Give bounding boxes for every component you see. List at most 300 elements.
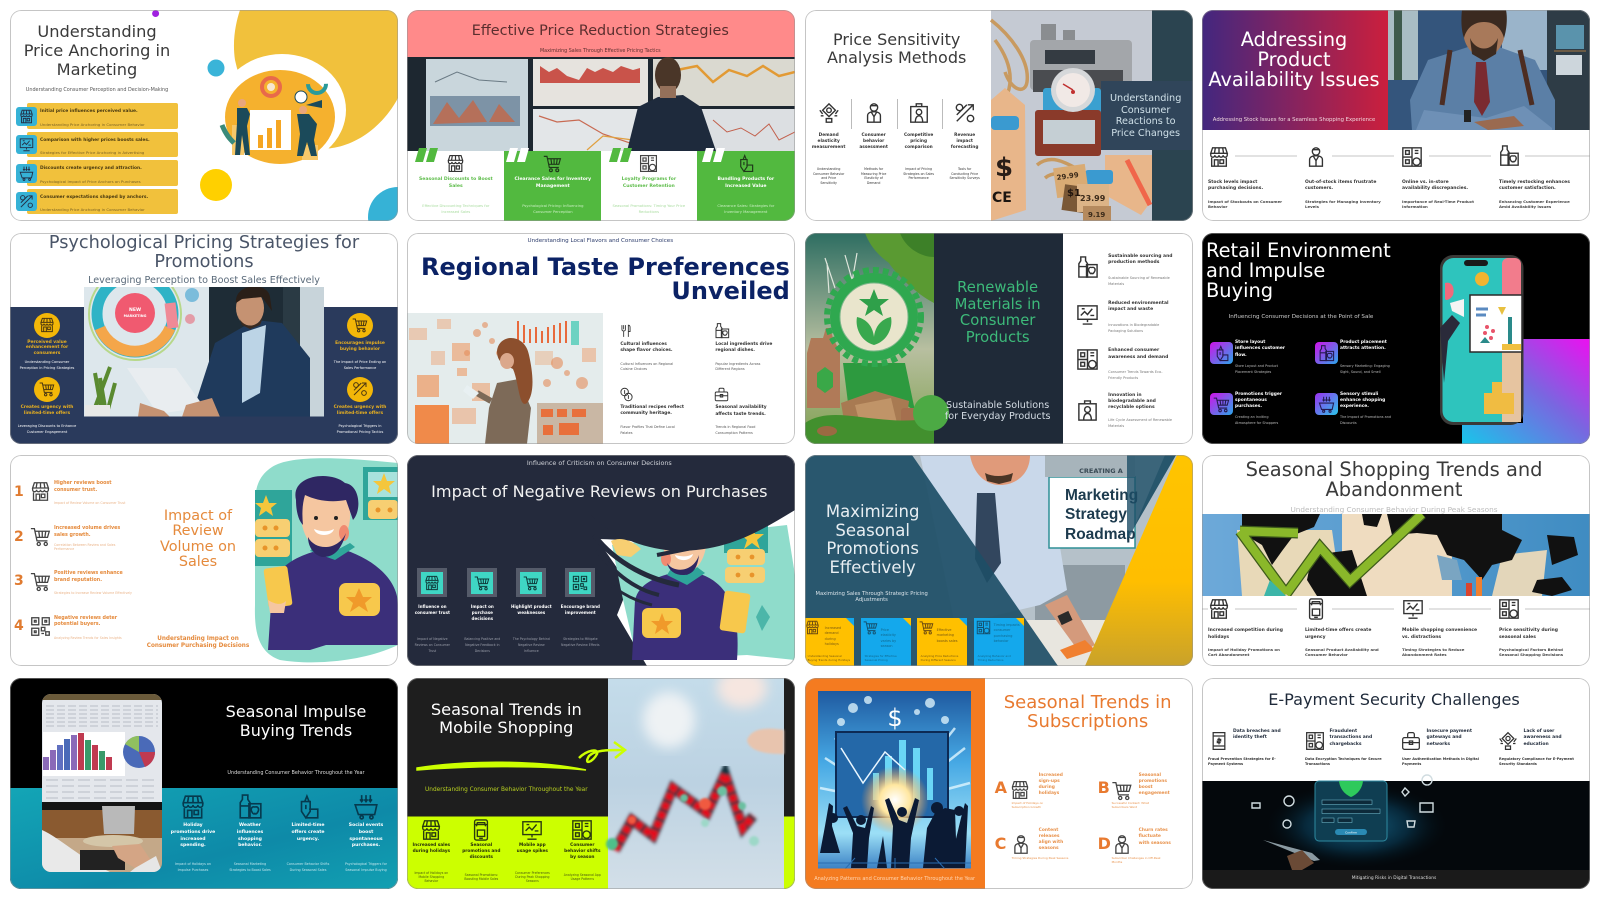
title: Seasonal Trends in bbox=[431, 700, 582, 718]
item 3: Friendly Products bbox=[1108, 376, 1138, 380]
item 3 bbox=[1402, 598, 1492, 663]
box 2 bbox=[861, 618, 911, 666]
challenge 2: Transactions bbox=[1305, 762, 1330, 766]
challenge 1: Fraud Prevention Strategies for E- bbox=[1208, 756, 1276, 760]
item: promotions bbox=[1210, 392, 1310, 426]
column 1: during holidays bbox=[413, 848, 450, 854]
item: store layout: flow. bbox=[1235, 353, 1247, 358]
item: promotions: Atmosphere for Shoppers bbox=[1235, 421, 1278, 425]
item 3: Importance of Real-Time Product bbox=[1402, 198, 1474, 204]
item 1 bbox=[1208, 598, 1298, 663]
method column 1 bbox=[812, 103, 846, 184]
right item 1 bbox=[334, 313, 386, 370]
right item 2 bbox=[334, 377, 386, 434]
item 4 bbox=[1499, 145, 1570, 209]
photo: glowing security app over tablet in the dark: Confirm bbox=[1345, 830, 1357, 834]
left item 1 bbox=[20, 313, 74, 370]
left item 1: Understanding Consumer bbox=[25, 360, 69, 364]
box corner accents bbox=[805, 455, 1193, 666]
column 4: Consumer bbox=[570, 842, 594, 848]
column 4: Analyzing Seasonal App bbox=[564, 872, 601, 876]
item 3: Enhanced consumer bbox=[1108, 348, 1159, 353]
item 1: production methods bbox=[1108, 260, 1159, 265]
column 4: Clearance Sales: Strategies for bbox=[717, 204, 774, 208]
item 2: Seasonal Product Availability and bbox=[1305, 647, 1379, 652]
column 2: Seasonal Promotions: bbox=[465, 872, 498, 876]
item: traditional recipes bbox=[620, 388, 684, 435]
column 2: influences bbox=[237, 830, 263, 835]
item 3: vs. distractions bbox=[1402, 634, 1441, 640]
title: Addressing bbox=[1241, 28, 1347, 50]
column 4 bbox=[338, 794, 395, 878]
item 1: Cart Abandonment bbox=[1208, 652, 1249, 657]
method column 1: Understanding bbox=[817, 167, 840, 171]
column 2: discounts bbox=[470, 854, 493, 860]
panel: Impact of Review Volume on Sales bbox=[10, 455, 398, 666]
method column 3: comparison bbox=[905, 145, 933, 150]
list item 3: Psychological Impact of Price Anchors on Purchases bbox=[40, 179, 141, 184]
item 1: Impact of Stockouts on Consumer bbox=[1208, 198, 1282, 204]
item: local ingredients: Different Regions bbox=[715, 367, 745, 371]
list item 4: Consumer expectations shaped by anchors. bbox=[40, 194, 148, 200]
item: store layout bbox=[1210, 342, 1310, 376]
right item 2: Psychological Triggers in bbox=[339, 424, 381, 428]
method column 4: impact bbox=[956, 139, 973, 144]
box 1: holidays bbox=[825, 642, 839, 646]
item B: Seasonal bbox=[1139, 772, 1161, 778]
column 3: Loyalty Programs for bbox=[622, 177, 676, 182]
column 4: behavior shifts bbox=[564, 848, 601, 854]
title: Subscriptions bbox=[1027, 710, 1148, 732]
item: local ingredients: Popular Ingredients Across bbox=[715, 362, 760, 366]
item C: align with bbox=[1039, 840, 1063, 845]
column 3: Reductions bbox=[639, 210, 659, 214]
photo: world map with zigzag green arrow bbox=[1202, 455, 1590, 666]
column 3: Limited-time bbox=[291, 823, 325, 828]
left item 2: Customer Engagement bbox=[27, 430, 67, 434]
subtitle: Understanding Consumer Perception and Decision-Making bbox=[26, 87, 168, 93]
column 4: Increased Value bbox=[725, 184, 766, 189]
item: traditional recipes: Traditional recipes reflect bbox=[620, 404, 684, 410]
item 4: Seasonal Shopping Decisions bbox=[1499, 652, 1563, 657]
column 4: Usage Patterns bbox=[571, 877, 594, 881]
column 1: Increased Sales bbox=[441, 210, 470, 214]
reason 3: Influence bbox=[524, 649, 539, 653]
column 3: Consumer Preferences bbox=[515, 870, 550, 874]
item: product placement: Sensory Marketing: Engaging bbox=[1340, 364, 1390, 368]
column 1: Mobile Shopping bbox=[418, 875, 444, 879]
item: seasonal availability: Trends in Regional Food bbox=[715, 425, 755, 429]
panel: Regional Taste Preferences Unveiled bbox=[407, 232, 795, 444]
review item 1: Impact of Review Volume on Consumer Trust bbox=[54, 501, 125, 505]
list item 2 bbox=[16, 132, 178, 157]
review item 4: Negative reviews deter bbox=[54, 616, 117, 620]
item: local ingredients bbox=[715, 323, 772, 371]
subtitle: for Everyday Products bbox=[945, 411, 1050, 422]
photo: woman in front of data wall and shelves bbox=[407, 313, 603, 444]
item 2: Innovations in Biodegradable bbox=[1108, 322, 1159, 326]
item A: Impact of Holidays on bbox=[1012, 801, 1043, 805]
method column 2: Consumer bbox=[862, 133, 886, 138]
method column 2: Methods for bbox=[864, 167, 883, 171]
method column 2: Demand bbox=[867, 180, 880, 184]
item 1 bbox=[1208, 147, 1282, 209]
column 2: Strategies to Boost Sales bbox=[229, 868, 271, 872]
item D: Subscriber Challenges in Off-Peak bbox=[1112, 856, 1161, 860]
item 1: Sustainable Sourcing of Renewable bbox=[1108, 276, 1170, 280]
item 4: Materials bbox=[1108, 424, 1124, 428]
subtitle: Maximizing Sales Through Strategic Pricing bbox=[816, 591, 928, 597]
review item 1: 1 bbox=[14, 484, 24, 500]
item 2: Consumer Behavior bbox=[1305, 652, 1348, 657]
panel: Seasonal Trends in Subscriptions bbox=[805, 678, 1193, 888]
column 4: Seasonal Impulse Buying bbox=[345, 868, 387, 872]
panel: Seasonal Impulse Buying Trends bbox=[10, 678, 398, 888]
title: Impact of Negative Reviews on Purchases bbox=[431, 482, 767, 501]
method column 2: Measuring Price bbox=[861, 172, 886, 176]
list item 4 bbox=[16, 189, 178, 214]
item: local ingredients: regional dishes. bbox=[715, 348, 755, 353]
method column 1: measurement bbox=[812, 145, 845, 150]
caption: Understanding Impact on bbox=[157, 636, 239, 642]
list item 4: Understanding Price Anchoring in Consumer Behavior bbox=[40, 207, 145, 212]
title bbox=[160, 509, 236, 570]
right item 1: Sales Performance bbox=[344, 366, 376, 370]
method column 4: Tools for bbox=[958, 167, 971, 171]
column 3 bbox=[508, 818, 558, 888]
item 1: holidays bbox=[1208, 634, 1229, 640]
photo: businessman with tablet and marketing wheel: MARKETING bbox=[124, 314, 147, 318]
item C: Content bbox=[1039, 828, 1058, 832]
title: Retail Environment bbox=[1206, 238, 1391, 262]
challenge 4: education bbox=[1524, 742, 1549, 747]
item D: with seasons bbox=[1139, 841, 1171, 846]
title: and Impulse bbox=[1206, 259, 1325, 282]
column 2: shopping bbox=[238, 837, 262, 842]
column 4: Social events bbox=[349, 823, 383, 828]
panel: E-Payment Security Challenges bbox=[1202, 678, 1590, 888]
column 3: usage spikes bbox=[517, 848, 548, 854]
column 4: by season bbox=[570, 854, 594, 860]
item 2: Levels bbox=[1305, 204, 1319, 209]
panel: Seasonal Trends in Mobile Shopping bbox=[407, 678, 795, 888]
reason 1: Impact of Negative bbox=[417, 637, 448, 641]
item 3: Consumer Trends Towards Eco- bbox=[1108, 370, 1162, 374]
challenge 4: Lack of user bbox=[1524, 728, 1554, 734]
title: Understanding bbox=[37, 22, 157, 40]
reason 1: consumer trust bbox=[415, 610, 450, 615]
left item 2: limited-time offers bbox=[24, 410, 70, 416]
method column 3: Performance bbox=[909, 176, 929, 180]
panel: Maximizing Seasonal Promotions Effectively bbox=[805, 455, 1193, 666]
item D: Churn rates bbox=[1139, 828, 1168, 832]
challenge 3: gateways and bbox=[1426, 735, 1462, 740]
box 2: Strategies for Effective bbox=[865, 654, 897, 658]
title: Mobile Shopping bbox=[439, 718, 573, 737]
item 1: Impact of Holiday Promotions on bbox=[1208, 647, 1280, 652]
item: cultural influences: shape flavor choices. bbox=[620, 348, 673, 353]
review item 4: 4 bbox=[14, 618, 24, 634]
reason 2: Balancing Positive and bbox=[464, 637, 500, 641]
review item 4: Analyzing Review Trends for Sales Insights bbox=[54, 636, 122, 640]
column 1: Behavior bbox=[424, 879, 438, 883]
reason 2: Impact on bbox=[471, 604, 494, 609]
challenge 1: Payment Systems bbox=[1208, 762, 1243, 766]
photo: glowing security app over tablet in the dark bbox=[1202, 678, 1590, 888]
reason 3 bbox=[506, 568, 556, 653]
left item 1: Perception in Pricing Strategies bbox=[20, 366, 74, 370]
item 4: recyclable options bbox=[1108, 404, 1155, 410]
reason 3: Highlight product bbox=[511, 604, 552, 609]
item B: B bbox=[1098, 778, 1110, 796]
reason 4: Encourage brand bbox=[561, 604, 600, 609]
photo: camera, gauge, price tags and dice: 29.99 bbox=[1056, 171, 1079, 182]
item 4 bbox=[1075, 392, 1193, 430]
title: Consumer bbox=[960, 312, 1035, 329]
item: sensory stimuli bbox=[1315, 392, 1415, 426]
photo: man viewing chart screens, with header and column backgrounds bbox=[407, 10, 795, 221]
box 4: purchasing bbox=[994, 634, 1012, 638]
subtitle: Sustainable Solutions bbox=[946, 400, 1049, 410]
box 1: Understanding Seasonal bbox=[808, 654, 842, 658]
column 2: behavior. bbox=[238, 843, 262, 848]
item A: Increased bbox=[1039, 772, 1063, 778]
item 4: Price sensitivity during bbox=[1499, 628, 1558, 632]
subtitle: Adjustments bbox=[855, 597, 888, 603]
title bbox=[431, 700, 582, 738]
photo: businessman at table, teal and yellow overlays, roadmap sign bbox=[805, 455, 1193, 666]
column 1: Holiday bbox=[183, 823, 203, 828]
item: seasonal availability: affects taste trends. bbox=[715, 412, 766, 416]
column 4: purchases. bbox=[352, 843, 380, 848]
box 4 bbox=[974, 618, 1024, 666]
box 4: behavior bbox=[994, 639, 1009, 643]
item 2 bbox=[1305, 598, 1395, 663]
review item 3 bbox=[14, 571, 144, 599]
method column 2: Elasticity of bbox=[864, 176, 883, 180]
left item 2 bbox=[18, 377, 76, 434]
method column 4: Conducting Price bbox=[951, 172, 978, 176]
item: cultural influences: Cultural Influences on Regional bbox=[620, 362, 673, 366]
callout: Understanding Consumer Reactions: Reactions to bbox=[1116, 116, 1176, 127]
footer band: Mitigating Risks in Digital Transactions bbox=[1352, 876, 1436, 881]
item B bbox=[1098, 772, 1191, 810]
reason 4: improvement bbox=[565, 610, 596, 615]
photo: camera, gauge, price tags and dice bbox=[990, 10, 1193, 221]
review item 1 bbox=[14, 481, 144, 509]
column 2: Seasonal Marketing bbox=[234, 862, 266, 866]
callout: Understanding Consumer Reactions: Price Changes bbox=[1111, 128, 1180, 138]
subtitle: Influencing Consumer Decisions at the Point of Sale bbox=[1229, 314, 1373, 320]
item 2: Out-of-stock items frustrate bbox=[1305, 180, 1376, 184]
item 3: awareness and demand bbox=[1108, 354, 1168, 360]
method column 2: assessment bbox=[859, 145, 888, 150]
box 1: Buying Trends during Holidays bbox=[808, 658, 850, 662]
column 3 bbox=[612, 155, 685, 214]
column 1: Impulse Purchases bbox=[178, 868, 208, 872]
panel: Psychological Pricing Strategies for Promotions bbox=[10, 232, 398, 444]
item 3: Timing Strategies to Reduce bbox=[1402, 647, 1464, 652]
photo: camera, gauge, price tags and dice: 9.19 bbox=[1088, 211, 1105, 219]
reason 1: Influence on bbox=[418, 604, 447, 609]
column 4: spontaneous bbox=[349, 837, 383, 842]
item 2: Packaging Solutions bbox=[1108, 328, 1143, 332]
panel: Seasonal Shopping Trends and Abandonment bbox=[1202, 455, 1590, 666]
method column 1: Sensitivity bbox=[820, 180, 837, 184]
item 1: Materials bbox=[1108, 282, 1124, 286]
list item 1: Initial price influences perceived value. bbox=[40, 109, 138, 114]
photo: blurred stock line with bokeh and lime brush stroke arrow bbox=[407, 678, 795, 888]
title: Promotions bbox=[154, 252, 254, 272]
item: promotions: purchases. bbox=[1235, 404, 1262, 409]
box 4: Timing Reductions bbox=[978, 658, 1003, 662]
column 1: Impact of Holidays on bbox=[414, 870, 448, 874]
item D bbox=[1098, 828, 1191, 864]
column 3: During Seasonal Sales bbox=[290, 868, 326, 872]
challenge 1: identity theft bbox=[1233, 735, 1267, 740]
item: sensory stimuli: enhance shopping bbox=[1340, 398, 1385, 403]
column 1: spending. bbox=[180, 843, 206, 848]
reason 1: Reviews on Consumer bbox=[415, 643, 450, 647]
item A: A bbox=[995, 778, 1007, 796]
item 4: Timely restocking enhances bbox=[1499, 180, 1570, 184]
photo: monitor with bar chart and pie chart on desk bbox=[10, 694, 398, 889]
method column 4 bbox=[949, 104, 980, 180]
item: seasonal availability: Seasonal availability bbox=[715, 405, 767, 410]
item: promotions: spontaneous bbox=[1235, 398, 1267, 403]
item C: releases bbox=[1039, 834, 1059, 839]
photo: businessman at table, teal and yellow overlays, roadmap sign: Roadmap bbox=[1065, 526, 1135, 543]
column 3: urgency. bbox=[297, 837, 319, 842]
method column 1: and Price bbox=[821, 176, 836, 180]
subtitle: Influence of Criticism on Consumer Decisions bbox=[527, 459, 672, 467]
challenge 4: awareness and bbox=[1524, 735, 1562, 740]
item: product placement: Product placement bbox=[1340, 340, 1387, 345]
column 4: Bundling Products for bbox=[717, 177, 774, 182]
item 4: biodegradable and bbox=[1108, 398, 1156, 404]
illustration: character emerging behind dark swoosh bbox=[407, 455, 795, 666]
subtitle: Understanding Local Flavors and Consumer Choices bbox=[528, 238, 673, 244]
title: Psychological Pricing Strategies for bbox=[49, 233, 359, 253]
title: Price Sensitivity bbox=[833, 30, 960, 49]
item: sensory stimuli: Discounts bbox=[1340, 421, 1357, 425]
panel: Understanding Price Anchoring in Marketing bbox=[10, 10, 398, 221]
column 4: Psychological Triggers for bbox=[345, 862, 387, 866]
column 2: Management bbox=[536, 184, 570, 189]
photo: businessman at table, teal and yellow overlays, roadmap sign: Marketing bbox=[1065, 487, 1138, 504]
item: promotions: Creating an Inviting bbox=[1235, 415, 1268, 419]
title: Volume on bbox=[160, 539, 236, 555]
item 3 bbox=[1402, 147, 1474, 209]
item: sensory stimuli: The Impact of Promotions and bbox=[1340, 415, 1391, 419]
title: Marketing bbox=[57, 60, 137, 78]
title bbox=[1206, 240, 1391, 301]
challenge 3 bbox=[1402, 728, 1494, 770]
title: Effective Price Reduction Strategies bbox=[472, 23, 729, 39]
icon timeline bbox=[1235, 156, 1590, 157]
item A bbox=[995, 772, 1095, 810]
reason 2: purchase bbox=[472, 610, 493, 615]
title: Seasonal Impulse bbox=[226, 702, 366, 721]
item 1: Increased competition during bbox=[1208, 628, 1283, 632]
box 4: consumer bbox=[994, 628, 1010, 632]
title: Review bbox=[172, 523, 224, 539]
column 1: Seasonal Discounts to Boost bbox=[419, 177, 493, 182]
item D: Months bbox=[1112, 860, 1122, 864]
method column 4: forecasting bbox=[951, 145, 978, 150]
photo: camera, gauge, price tags and dice: $1 bbox=[1067, 188, 1081, 199]
column 4: Inventory Management bbox=[724, 210, 767, 214]
subtitle: Understanding Consumer Behavior During Peak Seasons bbox=[1290, 505, 1498, 514]
reason 2: Negative Feedback in bbox=[465, 643, 500, 647]
column 1: increased bbox=[180, 837, 206, 842]
icon timeline bbox=[1202, 455, 1590, 666]
review item 2: Increased volume drives bbox=[54, 526, 120, 531]
box 1: demand bbox=[825, 631, 839, 635]
challenge 2: Data Encryption Techniques for Secure bbox=[1305, 756, 1382, 760]
column 1 bbox=[407, 818, 457, 888]
method column 2 bbox=[859, 103, 888, 184]
title bbox=[49, 233, 360, 272]
left item 2: Leveraging Discounts to Enhance bbox=[18, 424, 76, 428]
subtitle: Understanding Consumer Behavior Throughout the Year bbox=[227, 770, 365, 776]
callout: Understanding Consumer Reactions: Understanding bbox=[1110, 93, 1181, 104]
item: traditional recipes: Flavor Profiles That Define Local bbox=[620, 425, 675, 429]
list item 3 bbox=[16, 160, 178, 186]
item 3: Online vs. in-store bbox=[1402, 180, 1449, 184]
item D: D bbox=[1098, 834, 1111, 852]
challenge 1 bbox=[1208, 728, 1300, 770]
item 4: customer satisfaction. bbox=[1499, 186, 1556, 191]
item: cultural influences: Cultural influences bbox=[620, 342, 667, 346]
reason 3: The Psychology Behind bbox=[513, 637, 550, 641]
list item 1: Understanding Price Anchoring in Consumer Behavior bbox=[40, 122, 145, 127]
title: Promotions bbox=[826, 539, 919, 558]
caption: Analyzing Patterns and Consumer Behavior Throughout the Year bbox=[814, 876, 975, 882]
item 1: Stock levels impact bbox=[1208, 180, 1257, 184]
item: store layout: influences customer bbox=[1235, 346, 1285, 351]
review item 2: Performance bbox=[54, 547, 74, 551]
method column 3: pricing bbox=[910, 139, 927, 144]
method column 2: behavior bbox=[863, 139, 884, 144]
item B: Successful Content: What bbox=[1112, 801, 1149, 805]
column 3 bbox=[280, 794, 337, 878]
right item 2: Promotional Pricing Tactics bbox=[337, 430, 383, 434]
column 1: Impact of Holidays on bbox=[175, 862, 211, 866]
item 2: urgency bbox=[1305, 634, 1326, 640]
title: Effectively bbox=[829, 558, 916, 577]
subtitle: Addressing Stock Issues for a Seamless Shopping Experience bbox=[1213, 117, 1375, 123]
photo: frustrated man with arms crossed, on gradient header bbox=[1202, 10, 1590, 130]
item 1: Behavior bbox=[1208, 204, 1227, 209]
title: Availability Issues bbox=[1208, 68, 1380, 90]
title bbox=[826, 503, 919, 578]
column 2 bbox=[222, 794, 279, 878]
item: product placement: attracts attention. bbox=[1340, 346, 1386, 351]
box 3: During Different Seasons bbox=[921, 658, 956, 662]
column 3: Mobile app bbox=[519, 842, 546, 848]
title: Materials in bbox=[955, 296, 1041, 313]
box 4: Timing impacts bbox=[994, 623, 1020, 627]
method column 1: Demand bbox=[819, 133, 839, 138]
item 3: Information bbox=[1402, 204, 1428, 209]
column 2 bbox=[457, 818, 507, 888]
challenge 2 bbox=[1305, 728, 1397, 770]
challenge 3: networks bbox=[1426, 742, 1450, 747]
title: Seasonal Trends in bbox=[1004, 692, 1172, 712]
review item 3: 3 bbox=[14, 572, 24, 588]
column 1: Sales bbox=[449, 184, 463, 189]
